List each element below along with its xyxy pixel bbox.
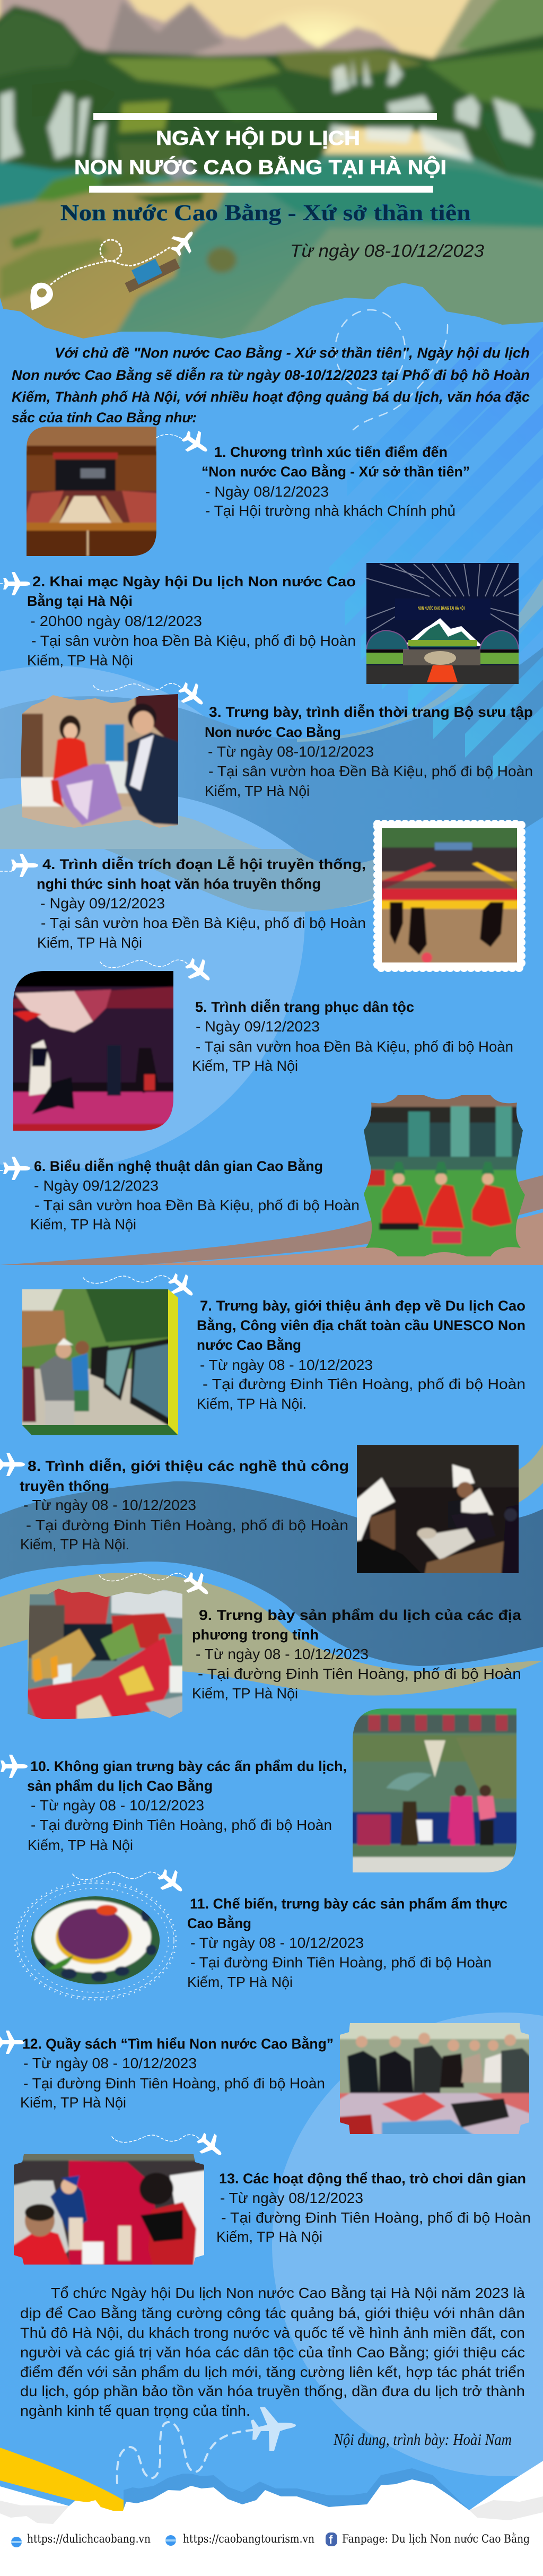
item 8 photo: traditional handicraft xyxy=(354,1442,522,1576)
item 2 text: Bằng tại Hà Nội xyxy=(27,593,133,609)
item 13 text: - Từ ngày 08/12/2023 xyxy=(220,2190,363,2206)
item 11 text: - Tại đường Đinh Tiên Hoàng, phố đi bộ Hoàn xyxy=(190,1954,492,1971)
item 12 text: Kiếm, TP Hà Nội xyxy=(20,2094,126,2111)
item 10 text: - Từ ngày 08 - 10/12/2023 xyxy=(31,1797,204,1814)
item 11 text xyxy=(187,1896,507,1990)
item 11 text: Kiếm, TP Hà Nội xyxy=(187,1974,293,1990)
background: diagonal stripes xyxy=(329,327,543,780)
item 10 text: sản phẩm du lịch Cao Bằng xyxy=(27,1777,213,1794)
hero photo: Ban Gioc waterfall landscape xyxy=(0,0,543,355)
small island xyxy=(207,247,237,273)
item 1 plane xyxy=(156,426,214,461)
item 8 text: - Từ ngày 08 - 10/12/2023 xyxy=(23,1497,196,1513)
footer link 3: fanpage: f xyxy=(329,2533,333,2546)
item 7 plane xyxy=(83,1269,200,1304)
large plane with dashed route xyxy=(117,2407,296,2483)
item 7 text: Kiếm, TP Hà Nội. xyxy=(197,1395,306,1412)
item 4 text: - Tại sân vườn hoa Đền Bà Kiệu, phố đi bộ Hoàn xyxy=(41,915,366,931)
item 2 text: 2. Khai mạc Ngày hội Du lịch Non nước Cao xyxy=(32,574,356,589)
footer: yellow swoosh xyxy=(0,2448,127,2511)
item 12 text: 12. Quầy sách “Tìm hiểu Non nước Cao Bằng” xyxy=(22,2035,334,2052)
item 5 text: 5. Trình diễn trang phục dân tộc xyxy=(195,999,414,1015)
item 2 plane xyxy=(0,572,30,595)
item 3 text: Kiếm, TP Hà Nội xyxy=(205,783,310,799)
background: tan swoosh top right xyxy=(519,1444,543,1503)
item 3 text: - Tại sân vườn hoa Đền Bà Kiệu, phố đi bộ Hoàn xyxy=(208,763,533,779)
item 7 text: nước Cao Bằng xyxy=(197,1337,301,1353)
item 11 photo: purple sticky rice xyxy=(31,1896,160,1984)
item 11 plane xyxy=(73,1864,189,1900)
item 9 plane xyxy=(99,1567,215,1603)
item 8 text xyxy=(20,1458,349,1552)
item 5 photo: ethnic costumes xyxy=(10,968,177,1134)
item 4 text: 4. Trình diễn trích đoạn Lễ hội truyền thống, xyxy=(42,856,366,872)
item 2 photo: festival stage xyxy=(366,563,519,684)
footer link 2: https://caobangtourism.vn xyxy=(183,2532,314,2545)
item 1 text: “Non nước Cao Bằng - Xứ sở thần tiên” xyxy=(202,463,470,480)
item 2 text: - 20h00 ngày 08/12/2023 xyxy=(30,613,202,629)
footer: gray mountains xyxy=(0,2496,543,2524)
background: dark wave xyxy=(0,647,543,881)
item 4 photo: traditional festival, stamp frame xyxy=(378,824,521,968)
item 8 text: - Tại đường Đinh Tiên Hoàng, phố đi bộ Hoàn xyxy=(26,1517,348,1533)
forest xyxy=(0,5,543,183)
item 7 text: Bằng, Công viên địa chất toàn cầu UNESCO Non xyxy=(197,1317,526,1333)
item 2 text: Kiếm, TP Hà Nội xyxy=(27,652,133,669)
intro paragraph: Với chủ đề "Non nước Cao Bằng - Xứ sở thần tiên", Ngày hội du lịch xyxy=(55,344,530,361)
footer: white area xyxy=(0,2461,543,2576)
background: large light circle left xyxy=(0,666,305,1170)
item 2 text: - Tại sân vườn hoa Đền Bà Kiệu, phố đi bộ Hoàn xyxy=(31,632,356,649)
item 3 plane xyxy=(93,678,210,713)
item 1 text: 1. Chương trình xúc tiến điểm đến xyxy=(214,444,448,460)
item 3 photo: fashion collection xyxy=(17,691,183,832)
closing paragraph: người và các giá trị văn hóa các dân tộc của tỉnh Cao Bằng; giới thiệu các xyxy=(20,2344,525,2361)
item 8 plane xyxy=(0,1453,25,1476)
item 8 text: truyền thống xyxy=(20,1478,109,1494)
footer: dark mountain xyxy=(124,2468,469,2520)
item 6 photo: folk art performance xyxy=(361,1092,526,1260)
item 13 text: 13. Các hoạt động thể thao, trò chơi dân gian xyxy=(219,2171,526,2187)
item 6 text: - Ngày 09/12/2023 xyxy=(34,1177,159,1194)
footer link 1: https://dulichcaobang.vn xyxy=(27,2532,151,2545)
closing paragraph: Tổ chức Ngày hội Du lịch Non nước Cao Bằng tại Hà Nội năm 2023 là xyxy=(51,2285,526,2301)
background: brown swoosh lower xyxy=(142,1212,543,1265)
background: light blue stripe inside sage xyxy=(173,808,294,849)
item 4 text xyxy=(37,856,366,951)
item 9 text: Kiếm, TP Hà Nội xyxy=(192,1685,298,1702)
item 7 text xyxy=(197,1298,526,1412)
item 3 text: 3. Trưng bày, trình diễn thời trang Bộ sưu tập xyxy=(209,704,533,720)
closing paragraph: dịp để Cao Bằng tăng cường công tác quảng bá, giới thiệu với nhân dân xyxy=(20,2305,525,2321)
item 9 text: - Tại đường Đinh Tiên Hoàng, phố đi bộ Hoàn xyxy=(198,1666,521,1682)
item 1 text xyxy=(202,444,470,519)
item 12 text: - Từ ngày 08 - 10/12/2023 xyxy=(23,2055,197,2071)
item 8 text: Kiếm, TP Hà Nội. xyxy=(20,1536,129,1552)
intro paragraph xyxy=(12,344,530,426)
item 11 text: 11. Chế biến, trưng bày các sản phẩm ẩm thực xyxy=(190,1896,507,1912)
item 5 text: Kiếm, TP Hà Nội xyxy=(192,1057,298,1074)
item 5 text: - Ngày 09/12/2023 xyxy=(196,1018,320,1035)
background: sage band xyxy=(0,801,374,909)
item 9 photo: local products market xyxy=(24,1585,186,1722)
item 7 text: 7. Trưng bày, giới thiệu ảnh đẹp về Du lịch Cao xyxy=(200,1298,526,1314)
hero title: NON NƯỚC CAO BẰNG TẠI HÀ NỘI xyxy=(74,155,446,179)
item 4 plane xyxy=(0,854,38,877)
item 9 text: phương trong tỉnh xyxy=(192,1627,319,1643)
item 2 photo: festival stage: NON NƯỚC CAO BẰNG TẠI HÀ NỘI xyxy=(418,606,465,611)
item 9 text: - Từ ngày 08 - 10/12/2023 xyxy=(196,1646,369,1662)
hero date: Từ ngày 08-10/12/2023 xyxy=(290,241,485,261)
water xyxy=(74,150,543,339)
footer link 1 xyxy=(11,2532,151,2547)
item 10 text: 10. Không gian trưng bày các ấn phẩm du lịch, xyxy=(30,1758,347,1774)
item 12 photo: book stand xyxy=(337,2020,532,2137)
item 10 text: - Tại đường Đinh Tiên Hoàng, phố đi bộ Hoàn xyxy=(31,1817,332,1833)
item 1 text: - Tại Hội trường nhà khách Chính phủ xyxy=(205,502,456,519)
hero title: NGÀY HỘI DU LỊCH xyxy=(156,126,360,150)
item 13 text xyxy=(216,2171,531,2245)
dashed decoration circle xyxy=(335,310,448,430)
item 5 plane xyxy=(100,953,217,989)
hero route with pin and plane xyxy=(30,224,202,310)
background: sage over the light circle xyxy=(104,849,374,912)
item 4 text: - Ngày 09/12/2023 xyxy=(40,895,165,912)
item 12 plane xyxy=(0,2031,24,2054)
closing paragraph: điểm đến với sản phẩm du lịch mới, tăng cường liên kết, hợp tác phát triển xyxy=(20,2364,525,2380)
closing paragraph: du lịch, góp phần bảo tồn văn hóa truyền thống, dần đưa du lịch trở thành xyxy=(20,2383,525,2399)
item 8 text: 8. Trình diễn, giới thiệu các nghề thủ công xyxy=(28,1458,349,1474)
background: sage crescent on wave crest xyxy=(297,578,543,742)
item 13 photo: folk games xyxy=(11,2151,207,2268)
intro paragraph: Kiếm, Thành phố Hà Nội, với nhiều hoạt động quảng bá du lịch, văn hóa đặc xyxy=(12,389,530,405)
item 6 text xyxy=(30,1158,360,1233)
item 13 plane xyxy=(112,2128,229,2164)
closing paragraph: ngành kinh tế quan trọng của tỉnh. xyxy=(20,2402,250,2419)
item 7 text: - Từ ngày 08 - 10/12/2023 xyxy=(200,1357,373,1373)
hero title xyxy=(74,113,446,193)
background: lower dark wave xyxy=(0,1481,543,1666)
item 1 photo: conference hall xyxy=(23,423,160,559)
item 5 text xyxy=(192,999,513,1074)
item 4 text: Kiếm, TP Hà Nội xyxy=(37,934,142,951)
hero subtitle: Non nước Cao Bằng - Xứ sở thần tiên xyxy=(60,201,471,225)
item 9 text xyxy=(192,1607,522,1702)
item 5 text: - Tại sân vườn hoa Đền Bà Kiệu, phố đi bộ Hoàn xyxy=(196,1038,513,1055)
river bank xyxy=(0,180,228,350)
item 3 text: - Từ ngày 08-10/12/2023 xyxy=(208,743,374,760)
item 13 text: Kiếm, TP Hà Nội xyxy=(216,2228,322,2245)
item 12 text xyxy=(20,2035,334,2111)
item 7 text: - Tại đường Đinh Tiên Hoàng, phố đi bộ Hoàn xyxy=(203,1376,526,1392)
item 11 text: Cao Bằng xyxy=(187,1915,251,1931)
item 10 text xyxy=(27,1758,347,1853)
boat xyxy=(125,258,180,293)
item 10 plane xyxy=(1,1755,28,1778)
item 6 text: Kiếm, TP Hà Nội xyxy=(30,1216,136,1233)
item 9 text: 9. Trưng bày sản phẩm du lịch của các địa xyxy=(199,1607,522,1623)
background: large light circle right xyxy=(272,2013,543,2476)
item 3 text: Non nước Cao Bằng xyxy=(205,724,341,740)
background: brown swoosh upper xyxy=(0,1175,543,1265)
item 6 text: - Tại sân vườn hoa Đền Bà Kiệu, phố đi bộ Hoàn xyxy=(34,1197,360,1213)
item 12 text: - Tại đường Đinh Tiên Hoàng, phố đi bộ Hoàn xyxy=(23,2075,325,2092)
item 7 photo: photo exhibition xyxy=(19,1286,178,1435)
item 6 plane xyxy=(0,1157,30,1180)
item 2 text xyxy=(27,574,356,669)
item 3 text xyxy=(205,704,533,799)
item 10 photo: tourism publications booth xyxy=(353,1708,516,1872)
item 11 wreath xyxy=(15,1881,176,2000)
item 13 text: - Tại đường Đinh Tiên Hoàng, phố đi bộ Hoàn xyxy=(221,2209,531,2226)
item 6 text: 6. Biểu diễn nghệ thuật dân gian Cao Bằng xyxy=(34,1158,323,1174)
background: tan swoosh xyxy=(0,1573,543,1696)
intro paragraph: Non nước Cao Bằng sẽ diễn ra từ ngày 08-10/12/2023 tại Phố đi bộ hồ Hoàn xyxy=(12,367,530,383)
closing paragraph: Thủ đô Hà Nội, du khách trong nước và quốc tế về hình ảnh miền đất, con xyxy=(20,2325,525,2341)
item 1 text: - Ngày 08/12/2023 xyxy=(205,483,329,500)
closing paragraph xyxy=(20,2285,526,2419)
item 4 text: nghi thức sinh hoạt văn hóa truyền thống xyxy=(37,876,321,892)
item 10 text: Kiếm, TP Hà Nội xyxy=(28,1837,133,1853)
credit: Nội dung, trình bày: Hoài Nam xyxy=(333,2430,512,2449)
item 11 text: - Từ ngày 08 - 10/12/2023 xyxy=(190,1935,364,1951)
intro paragraph: sắc của tỉnh Cao Bằng như: xyxy=(12,409,197,426)
waterfalls xyxy=(0,58,533,162)
